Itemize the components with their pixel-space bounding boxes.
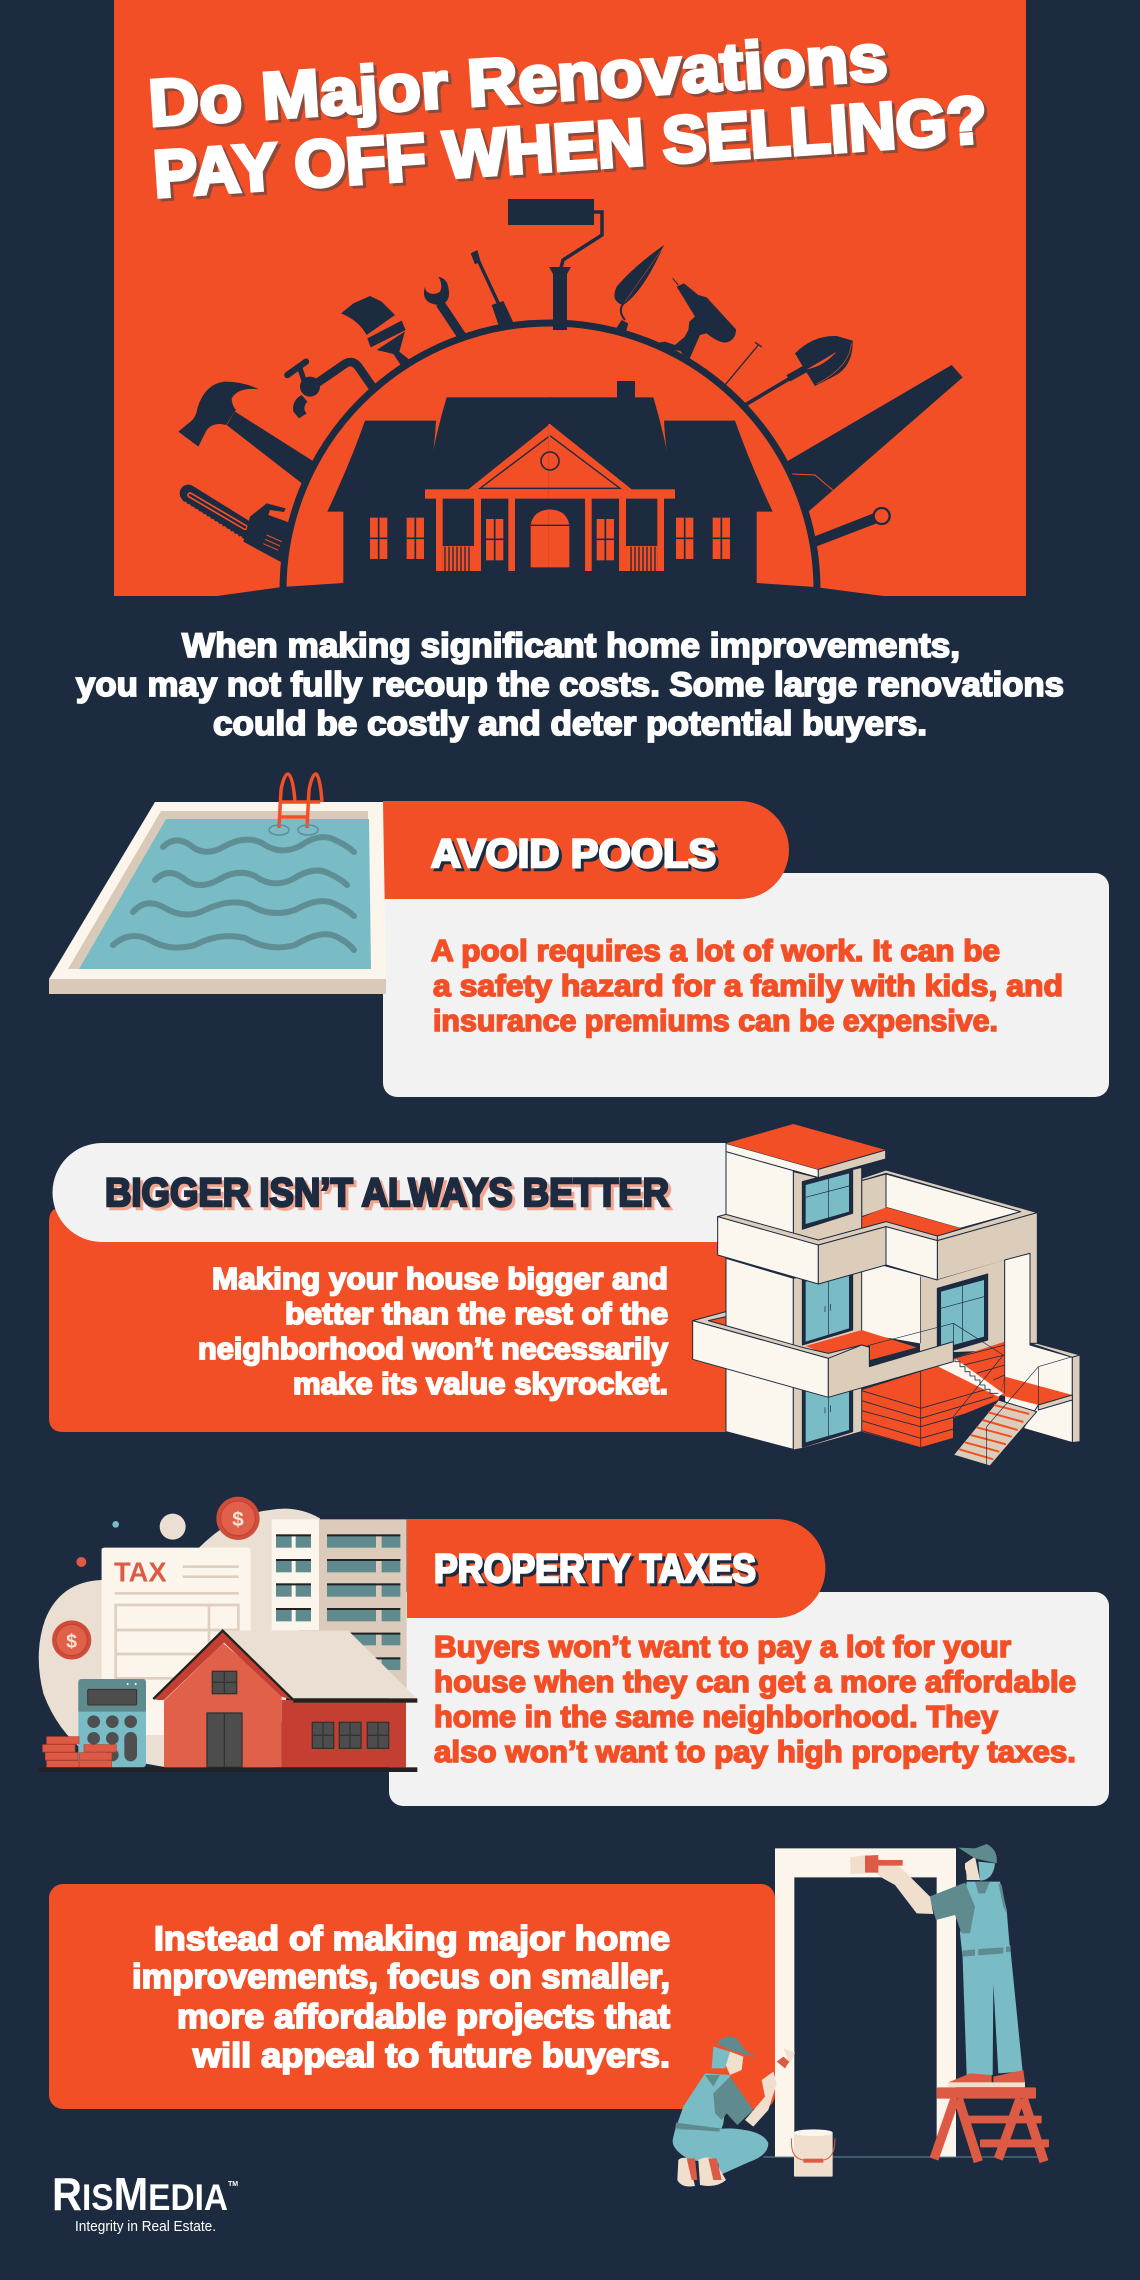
icon: nail bbox=[725, 342, 762, 385]
closing text: will appeal to future buyers. bbox=[192, 2037, 670, 2075]
icon: hammer bbox=[178, 382, 317, 485]
apartment building bbox=[272, 1519, 407, 1689]
closing text: more affordable projects that bbox=[177, 1998, 670, 2036]
icon: swimming pool bbox=[49, 774, 386, 994]
icon: paint roller bbox=[508, 199, 602, 330]
ground line bbox=[38, 1767, 417, 1772]
body: avoid pools bbox=[431, 933, 1063, 1038]
step stool bbox=[934, 2087, 1049, 2162]
body: avoid pools: insurance premiums can be expensive. bbox=[433, 1003, 998, 1038]
intro text: When making significant home improvements, bbox=[182, 627, 960, 665]
heading pill: property taxes bbox=[407, 1519, 825, 1618]
orange panel body bbox=[49, 1208, 727, 1432]
coin: dollar left: $ bbox=[66, 1631, 77, 1652]
orange panel bbox=[49, 1884, 775, 2109]
background blob bbox=[39, 1509, 320, 1767]
icon: chainsaw bbox=[184, 491, 292, 563]
brick base bbox=[862, 1342, 1005, 1448]
heading: bigger: BIGGER ISN’T ALWAYS BETTER bbox=[105, 1171, 669, 1215]
tax form bbox=[102, 1548, 251, 1735]
heading pill: avoid pools bbox=[383, 801, 789, 899]
icon: shovel bbox=[745, 336, 853, 405]
icon: isometric modern house bbox=[693, 1124, 1080, 1466]
panel: header bbox=[114, 0, 1026, 596]
lower stair bbox=[953, 1400, 1037, 1466]
coin: dollar top bbox=[216, 1497, 260, 1540]
icon: wrench bbox=[424, 277, 463, 338]
door frame bbox=[763, 1848, 1040, 2157]
icon: dome arc and ground bbox=[217, 323, 883, 596]
tower top bbox=[793, 1167, 862, 1241]
heading: avoid pools: AVOID POOLS bbox=[434, 835, 719, 879]
painter crouching bbox=[673, 2037, 795, 2187]
decorative dots bbox=[76, 1514, 186, 1567]
painter standing bbox=[850, 1844, 1025, 2087]
coin: dollar top: $ bbox=[232, 1508, 244, 1531]
closing text bbox=[132, 1920, 670, 2075]
intro text: you may not fully recoup the costs. Some large renovations bbox=[76, 666, 1064, 704]
upper band bbox=[718, 1214, 937, 1245]
upper stair bbox=[938, 1358, 1003, 1397]
icon: faucet bbox=[287, 362, 373, 418]
body: bigger: neighborhood won’t necessarily bbox=[198, 1331, 669, 1366]
railing lines bbox=[870, 1260, 1072, 1465]
body: property taxes: also won’t want to pay high property taxes. bbox=[434, 1734, 1076, 1769]
title: Do Major Renovations bbox=[146, 20, 889, 140]
body: property taxes: home in the same neighborhood. They bbox=[434, 1699, 999, 1734]
title bbox=[146, 19, 992, 214]
paint bucket bbox=[791, 2129, 835, 2177]
card: avoid pools text bbox=[383, 873, 1109, 1097]
heading: avoid pools: AVOID POOLS bbox=[431, 832, 716, 876]
icon: tools right of centre bbox=[614, 245, 963, 547]
body: avoid pools: A pool requires a lot of work. It can be bbox=[431, 933, 1000, 968]
card: property taxes text bbox=[389, 1592, 1109, 1806]
icon: screwdriver bbox=[471, 250, 515, 329]
closing text: Instead of making major home bbox=[154, 1920, 670, 1958]
logo: RISMedia: Integrity in Real Estate. bbox=[75, 2218, 216, 2235]
calculator bbox=[78, 1679, 146, 1767]
heading: property taxes: PROPERTY TAXES bbox=[437, 1550, 759, 1594]
tax form: TAX bbox=[114, 1557, 167, 1588]
body: property taxes: house when they can get a more affordable bbox=[434, 1664, 1076, 1699]
body: property taxes bbox=[434, 1629, 1076, 1769]
tower lower walls bbox=[726, 1258, 793, 1449]
body: avoid pools: a safety hazard for a family with kids, and bbox=[433, 968, 1063, 1003]
heading: bigger: BIGGER ISN’T ALWAYS BETTER bbox=[108, 1174, 672, 1218]
body: bigger: make its value skyrocket. bbox=[293, 1366, 668, 1401]
alcove and right column bbox=[862, 1260, 920, 1343]
heading pill: bigger bbox=[52, 1143, 727, 1242]
intro text: could be costly and deter potential buyers. bbox=[213, 705, 927, 743]
logo: RISMedia: TM bbox=[228, 2181, 238, 2188]
icon: painters and door frame bbox=[673, 1844, 1049, 2187]
icon: paintbrush bbox=[341, 296, 412, 369]
stacked coins bbox=[43, 1737, 116, 1767]
small red house bbox=[153, 1631, 417, 1767]
panel: property taxes bbox=[38, 1497, 1109, 1806]
closing text: improvements, focus on smaller, bbox=[132, 1958, 670, 1996]
heading: property taxes: PROPERTY TAXES bbox=[434, 1547, 756, 1591]
coin: dollar left bbox=[52, 1620, 91, 1660]
icon: tax illustration bbox=[38, 1497, 417, 1772]
icon: spanner handle bbox=[814, 508, 890, 547]
panel: bigger isn't always better bbox=[49, 1124, 1080, 1466]
balcony bbox=[806, 1330, 917, 1360]
intro text bbox=[76, 627, 1064, 743]
body: bigger: better than the rest of the bbox=[285, 1296, 668, 1331]
panel: avoid pools bbox=[49, 774, 1109, 1097]
icon: trowel bbox=[614, 245, 664, 335]
body: bigger bbox=[198, 1261, 669, 1401]
panel: closing advice bbox=[49, 1844, 1049, 2187]
icon: drill bbox=[653, 278, 736, 362]
icon: saw bbox=[787, 365, 963, 512]
body: bigger: Making your house bigger and bbox=[212, 1261, 668, 1296]
title: PAY OFF WHEN SELLING? bbox=[154, 85, 992, 214]
logo: RISMedia: RISMEDIA bbox=[52, 2168, 228, 2220]
icon: tools left of centre bbox=[178, 250, 515, 563]
title: PAY OFF WHEN SELLING? bbox=[151, 82, 989, 211]
back terrace bbox=[862, 1174, 886, 1217]
icon: house silhouette bbox=[327, 381, 773, 585]
title: Do Major Renovations bbox=[149, 22, 893, 143]
body: property taxes: Buyers won’t want to pay a lot for your bbox=[434, 1629, 1011, 1664]
